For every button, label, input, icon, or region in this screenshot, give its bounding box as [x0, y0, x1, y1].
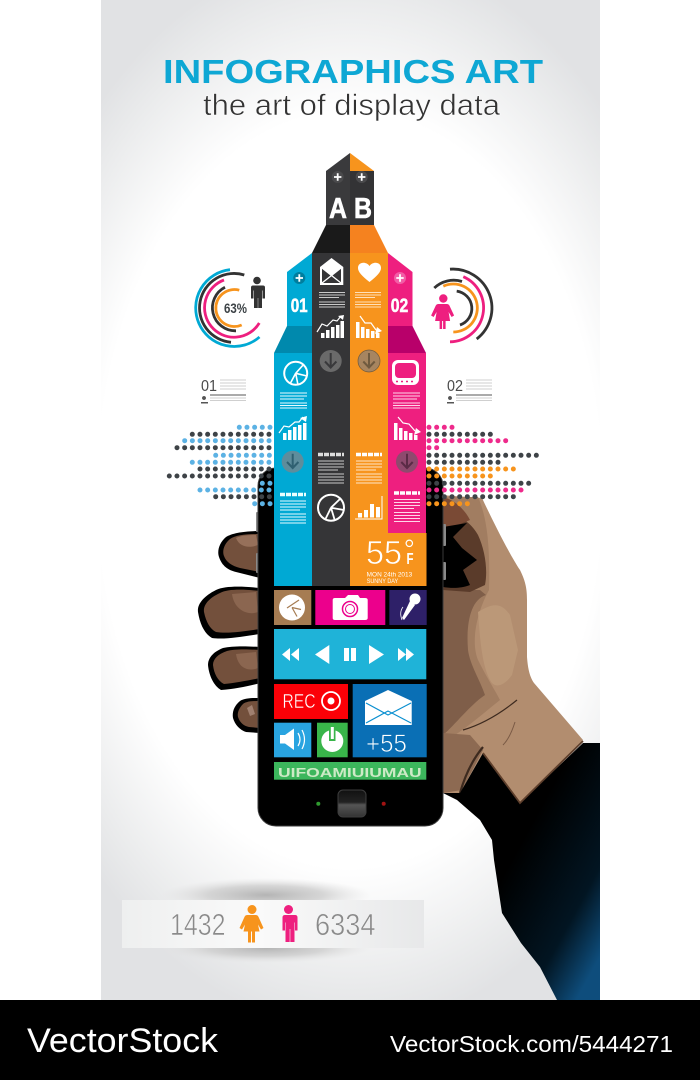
stat label 02	[447, 378, 492, 404]
finger 2	[198, 587, 260, 639]
phone side buttons	[256, 512, 446, 580]
title: INFOGRAPHICS ART	[163, 53, 543, 90]
author lines	[456, 394, 492, 396]
back of hand	[440, 495, 583, 803]
finger 1	[218, 531, 260, 578]
finger 4	[233, 698, 260, 733]
weather: unit: F	[406, 551, 414, 568]
tile: clock	[274, 590, 311, 625]
circular chart: female	[434, 269, 492, 342]
more lines	[456, 398, 492, 400]
number 02: 02	[391, 296, 408, 317]
phone	[256, 468, 446, 826]
column cyan	[274, 253, 312, 586]
tile: mail	[353, 684, 427, 758]
icon: man dark	[251, 277, 265, 308]
icon: heart	[358, 263, 381, 282]
letter A: A	[329, 193, 347, 225]
icon: woman pink	[431, 294, 454, 329]
women count: 1432	[170, 907, 226, 942]
text block orange	[356, 454, 382, 483]
text block cyan	[280, 494, 306, 523]
text block pink	[394, 493, 420, 522]
icon: falling chart pink	[394, 417, 421, 440]
plus badge A	[332, 171, 344, 183]
icon: down arrow cyan	[282, 451, 304, 473]
tile: ticker	[274, 762, 426, 780]
icon: bar chart orange	[355, 496, 382, 519]
sleeve cuff edge	[483, 741, 583, 803]
letter B: B	[354, 193, 372, 225]
percent label: 63%	[224, 300, 247, 316]
red led	[382, 802, 386, 806]
tile: microphone	[389, 590, 427, 625]
footer url: VectorStock.com/5444271	[390, 1031, 673, 1057]
nose cone B	[350, 153, 388, 253]
icon: rising chart dark	[317, 315, 344, 338]
sleeve	[443, 743, 600, 1000]
background panel	[101, 0, 600, 1000]
number: 02	[447, 378, 463, 395]
column orange	[350, 253, 388, 586]
tile: power	[317, 723, 348, 757]
subtitle: the art of display data	[203, 89, 500, 122]
tile: camera	[315, 590, 385, 625]
footer logo: VectorStock	[27, 1022, 219, 1060]
text lines dark	[319, 292, 345, 307]
column pink	[388, 253, 426, 533]
plus badge B	[356, 171, 368, 183]
author icon	[447, 396, 454, 404]
nose cone A	[312, 153, 350, 253]
icon: down arrow dark	[320, 350, 342, 372]
home button	[338, 790, 366, 817]
icon: falling chart orange	[356, 316, 382, 338]
weather: degree symbol	[406, 540, 412, 546]
number 01: 01	[291, 296, 308, 317]
weather tile base	[388, 533, 426, 586]
phone body	[258, 468, 443, 826]
dot map: left	[169, 427, 270, 504]
tile: mail: +55	[366, 730, 407, 758]
rocket-shaped column chart	[274, 153, 426, 586]
author lines	[210, 394, 246, 396]
text lines cyan	[280, 393, 307, 408]
weather: temperature: 55	[366, 534, 402, 571]
dot map: right	[429, 427, 538, 504]
icon: down arrow orange	[358, 350, 380, 372]
stat label 01	[201, 378, 246, 404]
tile: media controls	[274, 629, 426, 679]
text lines orange	[355, 292, 381, 307]
men count: 6334	[315, 907, 376, 942]
finger 3	[208, 646, 260, 690]
tile: record	[274, 684, 348, 719]
icon: down arrow pink	[396, 451, 418, 473]
tile: record: REC	[282, 691, 316, 713]
icon: envelope	[320, 258, 343, 285]
plus badge 02	[394, 272, 406, 284]
green led	[316, 802, 320, 806]
tile: speaker	[274, 723, 311, 757]
number: 01	[201, 378, 217, 395]
column dark	[312, 253, 350, 586]
icon: tv pink	[392, 360, 419, 385]
icon: pie cyan	[284, 362, 307, 385]
icon: woman orange	[240, 905, 264, 942]
icon: man pink	[282, 905, 298, 942]
author icon	[201, 396, 208, 404]
hand illustration	[198, 495, 600, 1000]
shadow above strip	[161, 878, 371, 912]
weather: condition: SUNNY DAY	[367, 579, 398, 585]
more lines	[210, 398, 246, 400]
circular chart: male	[196, 270, 260, 346]
icon: rising chart cyan	[279, 416, 307, 440]
tile: ticker: UIFOAMIUIUMAU	[278, 765, 422, 780]
text block dark	[318, 454, 344, 483]
icon: pie dark	[318, 495, 344, 521]
shadow below strip	[161, 933, 371, 963]
caption lines	[220, 380, 246, 389]
plus badge 01	[293, 272, 305, 284]
weather: date: MON 24th 2013	[367, 572, 413, 578]
caption lines	[466, 380, 492, 389]
footer bar	[0, 1000, 700, 1080]
stats strip	[122, 900, 424, 948]
text lines pink	[393, 393, 420, 408]
